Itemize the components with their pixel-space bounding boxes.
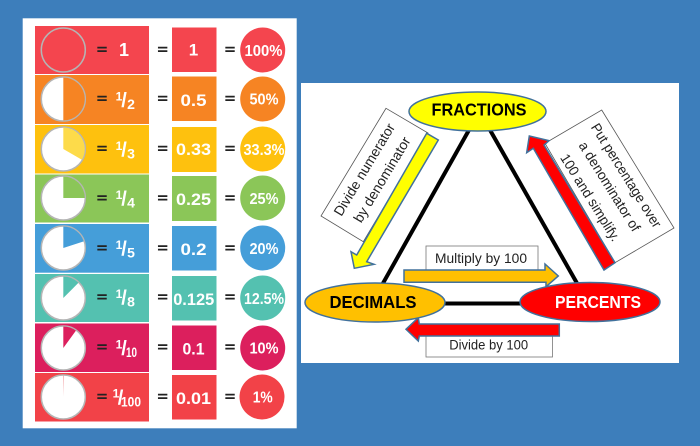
row: one third: / [121, 140, 127, 162]
node: decimals: DECIMALS [330, 292, 416, 312]
row: one half: 0.5 [180, 91, 206, 110]
arrow: orange decimals to percents [404, 264, 558, 287]
node: percents: PERCENTS [555, 292, 641, 312]
row: one eighth: 12.5% [244, 291, 284, 308]
row: one half [35, 75, 285, 124]
row: one hundredth: = [96, 387, 108, 405]
row: one fifth: 1 [116, 238, 123, 252]
row: one third [35, 125, 285, 174]
row: one fifth: = [224, 238, 236, 256]
panel: fraction decimal percent table [23, 18, 297, 428]
label box: divide by 100 [426, 336, 552, 357]
label box: divide numerator by denominator [321, 108, 428, 242]
label box: put percentage over denominator: 100 and simplify. [557, 151, 624, 244]
row: one whole: 1 [189, 40, 198, 60]
row: one whole [35, 26, 285, 74]
label box: multiply by 100 [426, 246, 538, 270]
row: one tenth: = [156, 338, 169, 356]
row: one hundredth: = [224, 387, 236, 405]
panel: conversion triangle [301, 83, 679, 363]
row: one whole: 100% [244, 43, 282, 60]
label box: divide numerator by denominator: by denominator [350, 133, 414, 225]
row: one hundredth: 1% [253, 390, 273, 406]
row: one fifth [35, 224, 285, 273]
row: one fifth: 20% [250, 241, 278, 258]
row: one eighth: = [156, 288, 169, 306]
row: one fifth: / [121, 238, 127, 260]
row: one tenth: = [96, 338, 108, 356]
row: one eighth: = [224, 288, 236, 306]
row: one whole: = [96, 40, 108, 58]
row: one whole: 1 [119, 40, 129, 60]
row: one quarter: 4 [127, 194, 135, 210]
row: one third: = [156, 139, 169, 157]
label box: put percentage over denominator: a denominator of [576, 138, 644, 234]
row: one quarter: = [96, 188, 108, 206]
row: one eighth: / [121, 288, 127, 310]
row: one eighth [35, 274, 285, 322]
row: one half: 50% [250, 92, 278, 108]
row: one hundredth: 100 [121, 394, 141, 410]
row: one tenth: 1 [116, 338, 123, 352]
row: one whole: = [156, 40, 169, 58]
row: one third: = [96, 139, 108, 157]
row: one third: 1 [116, 139, 123, 153]
row: one hundredth: 1 [113, 386, 120, 400]
row: one hundredth [35, 373, 284, 422]
row: one tenth: 0.1 [182, 340, 204, 358]
row: one quarter: 0.25 [176, 190, 211, 209]
row: one quarter: = [224, 188, 236, 206]
row: one eighth: 8 [127, 294, 135, 310]
row: one tenth: / [121, 338, 127, 360]
row: one third: 0.33 [176, 140, 211, 159]
arrow: yellow fractions to decimals [351, 133, 438, 268]
row: one half: = [156, 89, 169, 107]
row: one half: = [96, 89, 108, 107]
row: one tenth: 10 [126, 344, 137, 360]
row: one fifth: = [96, 238, 108, 256]
row: one half: / [121, 90, 127, 112]
row: one quarter [35, 174, 285, 222]
row: one third: = [224, 139, 236, 157]
row: one fifth: = [156, 238, 169, 256]
row: one third: 33.3% [244, 142, 284, 159]
label box: multiply by 100: Multiply by 100 [435, 250, 527, 266]
row: one quarter: / [121, 188, 127, 210]
node: decimals [305, 283, 445, 322]
row: one third: 3 [127, 146, 135, 162]
row: one tenth: = [224, 338, 236, 356]
row: one quarter: 25% [250, 191, 278, 208]
row: one eighth: 1 [116, 287, 123, 301]
label box: put percentage over denominator [545, 110, 674, 263]
node: percents [520, 282, 660, 322]
row: one half: 1 [116, 90, 123, 104]
row: one quarter: 1 [116, 188, 123, 202]
row: one half: 2 [127, 96, 135, 112]
label box: put percentage over denominator: Put percentage over [588, 120, 665, 231]
arrow: red percents to decimals [406, 318, 559, 341]
row: one eighth: 0.125 [173, 290, 214, 309]
triangle connecting lines [382, 130, 578, 304]
label box: divide by 100: Divide by 100 [449, 336, 528, 352]
row: one fifth: 0.2 [180, 240, 206, 259]
row: one half: = [224, 89, 236, 107]
row: one fifth: 5 [127, 244, 135, 260]
row: one quarter: = [156, 188, 169, 206]
row: one hundredth: / [118, 388, 124, 410]
arrow: red percents to fractions [527, 136, 615, 270]
node: fractions: FRACTIONS [432, 100, 526, 120]
row: one hundredth: 0.01 [176, 389, 211, 408]
row: one eighth: = [96, 288, 108, 306]
row: one tenth: 10% [250, 340, 278, 358]
node: fractions [409, 92, 546, 131]
row: one hundredth: = [156, 387, 169, 405]
label box: divide numerator by denominator: Divide numerator [330, 120, 398, 219]
row: one whole: = [224, 40, 236, 58]
row: one tenth [35, 324, 285, 372]
